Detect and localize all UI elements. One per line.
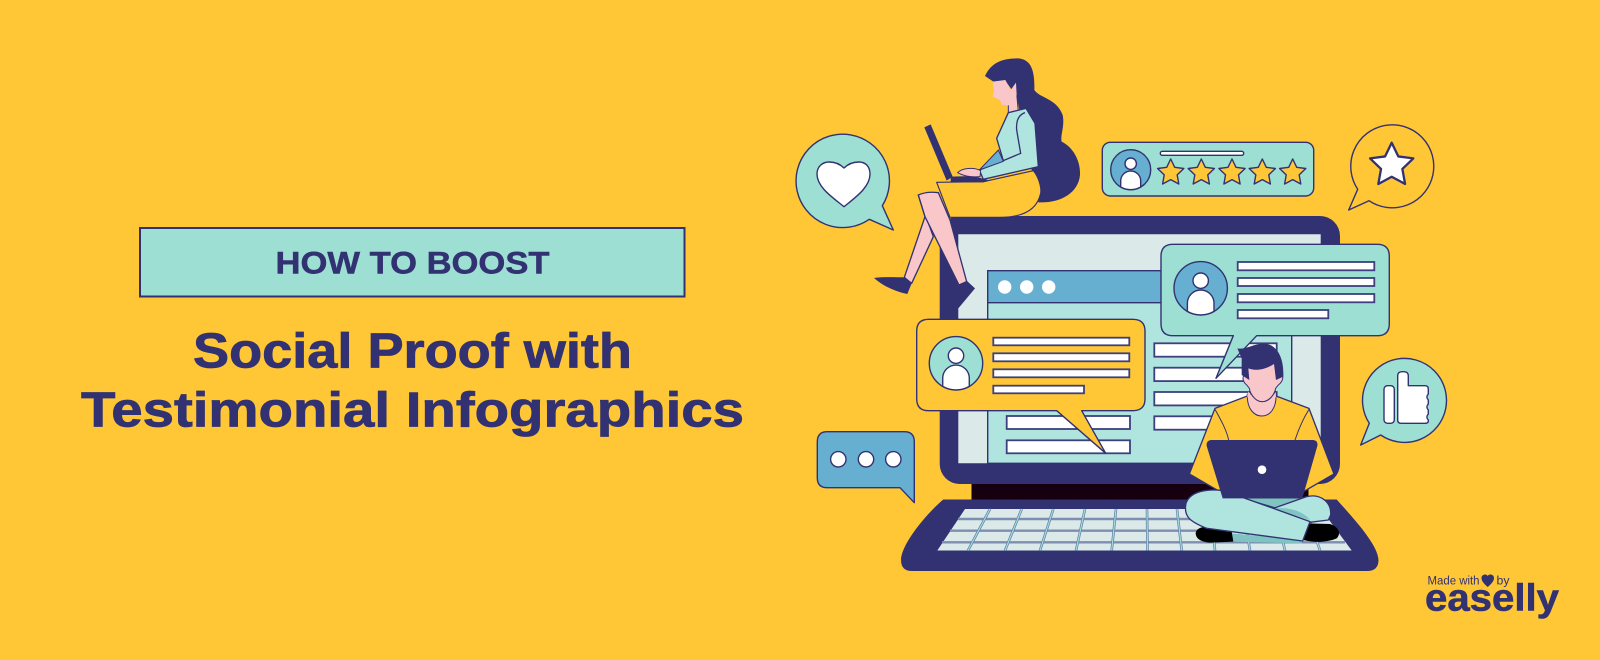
illustration: woman with laptop <box>874 58 1080 308</box>
man shoes <box>1196 523 1339 543</box>
woman back leg <box>904 195 933 283</box>
woman face <box>993 80 1017 106</box>
man neck collar <box>1247 394 1276 416</box>
illustration: laptop monitor <box>940 216 1340 500</box>
easelly logo: easelly <box>1425 578 1559 620</box>
banner: how to boost <box>140 228 684 296</box>
woman shirt <box>979 108 1038 179</box>
man hair <box>1237 343 1283 380</box>
woman hair <box>985 58 1080 202</box>
icon: star speech bubble <box>1349 125 1434 210</box>
icon: thumbs-up speech bubble <box>1361 358 1447 445</box>
woman front leg <box>918 192 967 285</box>
banner: how to boost: HOW TO BOOST <box>276 244 550 280</box>
easelly logo: by <box>1496 576 1510 588</box>
man face <box>1243 363 1283 402</box>
man lap shadow <box>1232 498 1303 543</box>
title: Social Proof with <box>193 324 632 378</box>
woman neck <box>1008 93 1018 115</box>
woman skirt <box>937 171 1041 217</box>
man shirt <box>1189 396 1334 492</box>
man legs <box>1273 496 1331 522</box>
title: Testimonial Infographics <box>81 384 744 438</box>
icon: typing chat bubble <box>817 432 914 503</box>
woman shoes <box>874 277 975 308</box>
testimonial bubble: yellow <box>917 319 1145 453</box>
icon: heart speech bubble <box>796 134 893 230</box>
testimonial bubble: teal <box>1161 244 1389 378</box>
icon: review card with stars <box>1102 142 1314 196</box>
man laptop <box>1207 440 1317 498</box>
easelly logo: Made with <box>1428 576 1480 588</box>
title <box>81 324 744 438</box>
laptop keyboard base <box>901 500 1378 571</box>
woman hand <box>958 168 981 177</box>
woman laptop <box>924 124 953 181</box>
illustration: man with laptop <box>1185 343 1339 543</box>
